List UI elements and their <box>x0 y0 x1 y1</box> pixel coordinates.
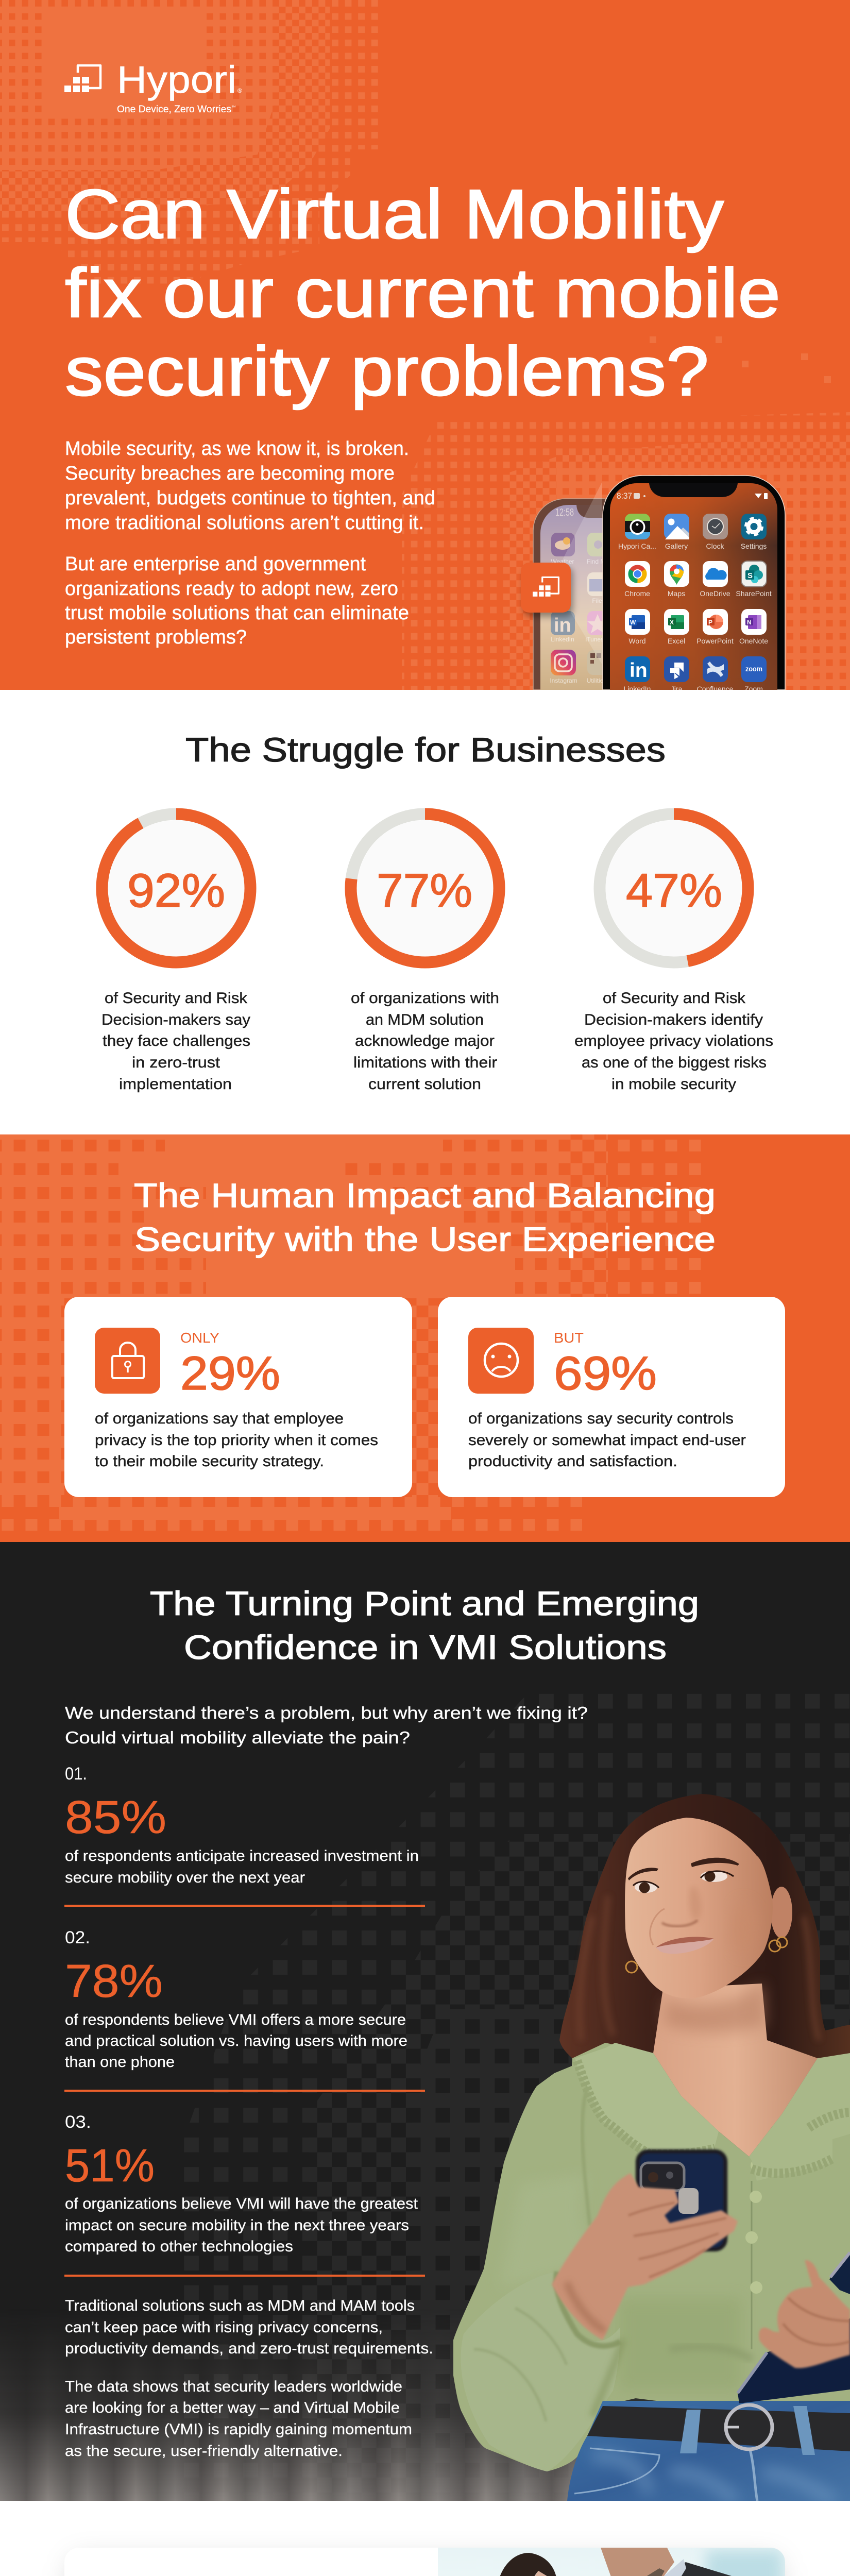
stat 02 <box>65 1928 407 2071</box>
back phone: Weather <box>551 558 574 565</box>
icon: Zoom <box>741 656 767 682</box>
jeans and belt <box>567 2401 850 2501</box>
main phone: Word <box>628 637 646 645</box>
icon: Chrome <box>625 561 650 587</box>
icon: Maps <box>664 561 689 587</box>
stat 02: of respondents believe VMI offers a more secure <box>65 2011 406 2028</box>
panel: survey card <box>64 2548 785 2576</box>
right hand <box>759 2260 850 2368</box>
phones illustration <box>521 476 785 693</box>
icon: SharePoint: S <box>747 571 753 580</box>
back phone: Utilities <box>587 677 606 684</box>
icon: SharePoint <box>741 561 767 587</box>
main phone: Confluence <box>697 685 734 693</box>
closing paragraph one <box>65 2297 433 2357</box>
icon: Hypori Camera <box>625 514 650 539</box>
heading: The Turning Point and Emerging <box>150 1584 699 1622</box>
description <box>351 990 499 1093</box>
intro paragraph one: more traditional solutions aren’t cutting it. <box>65 512 424 534</box>
woman: face <box>525 2571 558 2576</box>
description: of organizations with <box>351 990 499 1007</box>
closing paragraph one: productivity demands, and zero-trust requirements. <box>65 2340 433 2357</box>
description: of organizations say that employee <box>95 1410 344 1427</box>
intro paragraph one: prevalent, budgets continue to tighten, and <box>65 487 435 509</box>
title: security problems? <box>65 332 709 410</box>
stat 03: of organizations believe VMI will have the greatest <box>65 2195 418 2212</box>
description: of organizations say security controls <box>468 1410 734 1427</box>
stat 02: 78% <box>65 1956 163 2007</box>
main phone: Excel <box>668 637 685 645</box>
main phone: Gallery <box>665 542 688 550</box>
icon: Jira <box>664 656 689 682</box>
stat 03 <box>65 2112 418 2255</box>
intro question: We understand there’s a problem, but why aren’t we fixing it? <box>65 1703 588 1722</box>
back phone: Instagram <box>550 677 577 684</box>
section background pixel pattern <box>0 1134 706 1542</box>
icon: LinkedIn <box>625 656 650 682</box>
stat 02: than one phone <box>65 2054 175 2071</box>
logo: Hypori: ™ <box>231 105 236 110</box>
donut chart: 92%: 92% <box>127 865 225 917</box>
main phone: SharePoint <box>736 589 772 598</box>
earrings <box>626 1937 787 1973</box>
icon: OneDrive <box>703 561 728 587</box>
closing paragraph one: Traditional solutions such as MDM and MAM tools <box>65 2297 415 2314</box>
icon: Excel <box>664 609 689 635</box>
card: 69 percent: 69% <box>554 1347 657 1400</box>
icon: Excel: X <box>670 619 674 626</box>
logo: Hypori: One Device, Zero Worries <box>117 104 231 115</box>
stat 02: 02. <box>65 1928 90 1947</box>
back phone <box>533 482 609 690</box>
stat: 47 percent <box>574 814 773 1093</box>
intro question: Could virtual mobility alleviate the pain? <box>65 1728 410 1747</box>
icon: Clock <box>703 514 728 539</box>
man: head <box>601 2548 674 2576</box>
closing paragraph one: can’t keep pace with rising privacy concerns, <box>65 2319 383 2336</box>
icon: PowerPoint <box>703 609 728 635</box>
stat 03: compared to other technologies <box>65 2238 293 2255</box>
main phone: 8:37 <box>617 491 632 501</box>
card: 69 percent: BUT <box>554 1330 584 1346</box>
main phone <box>603 476 785 693</box>
stat 03: impact on secure mobility in the next three years <box>65 2217 409 2234</box>
icon: sad face <box>468 1328 534 1394</box>
intro paragraph two: persistent problems? <box>65 626 247 648</box>
icon: Settings <box>741 514 767 539</box>
hand holding phone <box>552 2173 738 2340</box>
closing paragraph two: Infrastructure (VMI) is rapidly gaining momentum <box>65 2421 412 2438</box>
description: in zero-trust <box>132 1054 220 1071</box>
stat 03: 51% <box>65 2140 155 2192</box>
description: Decision-makers identify <box>584 1011 763 1028</box>
stat 01: 01. <box>65 1764 87 1784</box>
section background pixel pattern <box>175 1685 850 2501</box>
panel: the struggle for businesses <box>0 690 850 1134</box>
main phone: Hypori Ca... <box>618 542 656 550</box>
card: 29 percent: 29% <box>180 1347 280 1400</box>
stat: 77 percent <box>351 814 499 1093</box>
stat: 92 percent <box>101 814 250 1093</box>
donut chart: 47%: 47% <box>626 865 722 917</box>
icon: Word: W <box>630 619 636 626</box>
donut chart: 47% <box>600 814 748 962</box>
back phone: 12:58 <box>555 507 574 518</box>
back phone: Find My <box>587 558 608 565</box>
icon: Word <box>625 609 650 635</box>
man: beard <box>618 2568 665 2576</box>
icon: Confluence <box>703 656 728 682</box>
description <box>574 990 773 1093</box>
main phone: OneNote <box>739 637 768 645</box>
description <box>95 1410 378 1470</box>
stat 01: of respondents anticipate increased investment in <box>65 1848 419 1865</box>
card: 29 percent <box>64 1297 412 1497</box>
title <box>65 175 780 410</box>
collar <box>575 2043 850 2181</box>
description <box>101 990 250 1093</box>
closing paragraph two: are looking for a better way – and Virtual Mobile <box>65 2399 400 2416</box>
description: productivity and satisfaction. <box>468 1453 677 1470</box>
back phone: iTunes S <box>586 636 609 643</box>
description: as one of the biggest risks <box>582 1054 767 1071</box>
heading: Confidence in VMI Solutions <box>184 1628 667 1666</box>
face <box>625 1818 773 1998</box>
icon: LinkedIn: in <box>630 659 648 682</box>
description: current solution <box>368 1076 481 1093</box>
card: 29 percent: ONLY <box>180 1330 219 1346</box>
icon: Gallery <box>664 514 689 539</box>
neck and chest <box>653 1984 818 2157</box>
description <box>468 1410 746 1470</box>
description: Decision-makers say <box>101 1011 250 1028</box>
woman: hair <box>496 2553 568 2576</box>
shadow: under chin <box>665 1984 765 2032</box>
donut chart: 92% <box>102 814 250 962</box>
blouse <box>453 2043 850 2471</box>
description: they face challenges <box>103 1032 250 1049</box>
description: to their mobile security strategy. <box>95 1453 324 1470</box>
logo: Hypori: ® <box>237 87 242 94</box>
main phone: PowerPoint <box>696 637 734 645</box>
intro paragraph two <box>65 553 409 648</box>
icon: OneNote <box>741 609 767 635</box>
back phone: LinkedIn <box>551 636 574 643</box>
description: severely or somewhat impact end-user <box>468 1432 746 1449</box>
panel: human impact <box>0 1134 850 1542</box>
hair <box>559 1794 850 2058</box>
photo: woman with phone <box>453 1794 850 2501</box>
intro paragraph two: organizations ready to adopt new, zero <box>65 578 398 600</box>
icon: OneNote: N <box>747 619 752 626</box>
backdrop: blurred curtain fade <box>0 2267 618 2501</box>
stat 02: and practical solution vs. having users with more <box>65 2032 407 2049</box>
icon: padlock <box>95 1328 160 1394</box>
description: limitations with their <box>353 1054 497 1071</box>
logo: Hypori: Hypori <box>117 58 236 101</box>
man: shirt <box>628 2559 686 2576</box>
stat 01: secure mobility over the next year <box>65 1869 305 1886</box>
donut chart: 77% <box>351 814 499 962</box>
main phone: LinkedIn <box>624 685 651 693</box>
main phone: Clock <box>706 542 724 550</box>
title: Can Virtual Mobility <box>65 175 724 253</box>
description: implementation <box>119 1076 232 1093</box>
man: jacket <box>615 2562 754 2576</box>
logo: Hypori <box>64 58 242 115</box>
panel: hero <box>0 0 850 693</box>
description: an MDM solution <box>366 1011 484 1028</box>
intro paragraph one <box>65 438 435 534</box>
icon: Zoom: zoom <box>745 665 762 673</box>
title: fix our current mobile <box>65 254 780 332</box>
closing paragraph two: as the secure, user-friendly alternative. <box>65 2443 343 2460</box>
description: of Security and Risk <box>105 990 248 1007</box>
main phone: Maps <box>668 589 685 598</box>
description: employee privacy violations <box>574 1032 773 1049</box>
heading <box>134 1176 716 1258</box>
donut chart: 77%: 77% <box>377 865 472 917</box>
heading: Security with the User Experience <box>134 1220 716 1258</box>
main phone: Settings <box>741 542 767 550</box>
back phone: Files <box>592 597 605 604</box>
stat 03: 03. <box>65 2112 91 2132</box>
heading <box>150 1584 699 1666</box>
intro paragraph one: Security breaches are becoming more <box>65 463 395 484</box>
icon: Hypori app tile <box>521 563 573 617</box>
icon: PowerPoint: P <box>708 619 712 626</box>
ear <box>771 1887 792 1938</box>
intro paragraph one: Mobile security, as we know it, is broken. <box>65 438 409 460</box>
back phone: in <box>554 615 571 636</box>
main phone: OneDrive <box>700 589 730 598</box>
intro paragraph two: trust mobile solutions that can eliminate <box>65 602 409 624</box>
hero background pixel pattern <box>0 0 850 690</box>
main phone: Zoom <box>744 685 763 693</box>
stat 01 <box>65 1764 419 1886</box>
intro paragraph two: But are enterprise and government <box>65 553 366 575</box>
description: of Security and Risk <box>603 990 746 1007</box>
main phone: Jira <box>671 685 682 693</box>
photo: two colleagues with phone <box>438 2548 785 2576</box>
panel: turning point <box>0 1542 850 2501</box>
main phone: Chrome <box>624 589 650 598</box>
description: in mobile security <box>611 1076 736 1093</box>
description: privacy is the top priority when it comes <box>95 1432 378 1449</box>
closing paragraph two <box>65 2378 412 2460</box>
card: 69 percent <box>438 1297 785 1497</box>
heading: The Struggle for Businesses <box>185 731 666 769</box>
phone in hand <box>638 2151 725 2249</box>
description: acknowledge major <box>355 1032 495 1049</box>
closing paragraph two: The data shows that security leaders worldwide <box>65 2378 402 2395</box>
heading: The Human Impact and Balancing <box>134 1176 716 1214</box>
icon: Hypori mark <box>64 65 100 92</box>
stat 01: 85% <box>65 1792 166 1843</box>
book <box>738 2252 850 2403</box>
intro question <box>65 1703 588 1747</box>
